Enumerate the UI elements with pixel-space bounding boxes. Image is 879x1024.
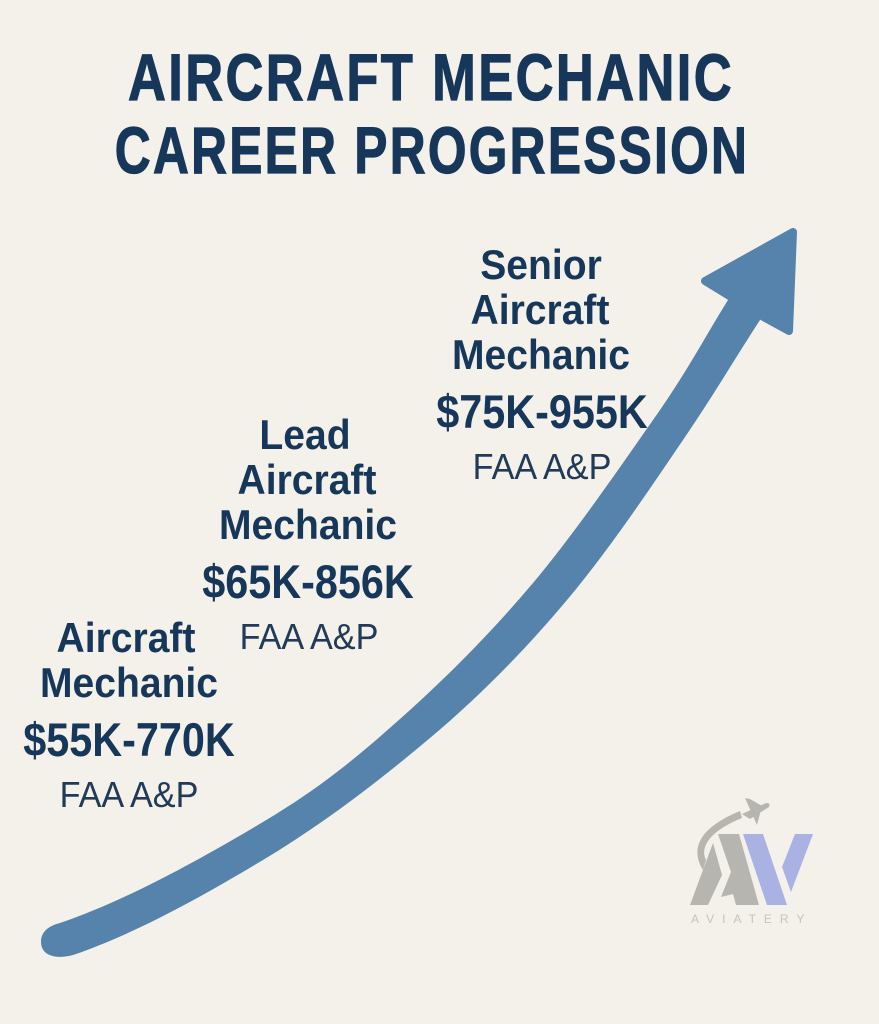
level: aircraft mechanic: FAA A&P	[60, 774, 198, 815]
title	[115, 40, 749, 187]
level: senior aircraft mechanic: Aircraft	[471, 286, 609, 333]
logo letter V	[743, 834, 813, 905]
level: senior aircraft mechanic: Senior	[480, 241, 602, 288]
level: lead aircraft mechanic: Lead	[259, 411, 351, 458]
logo letter A	[690, 834, 759, 905]
level: lead aircraft mechanic: Mechanic	[219, 501, 397, 548]
level: aircraft mechanic: Aircraft	[57, 614, 195, 661]
level: lead aircraft mechanic: Aircraft	[238, 456, 376, 503]
logo: aviatery	[690, 798, 813, 926]
level: senior aircraft mechanic: Mechanic	[452, 331, 630, 378]
level: senior aircraft mechanic: $75K-955K	[436, 385, 648, 438]
level: aircraft mechanic: Mechanic	[40, 659, 218, 706]
title: AIRCRAFT MECHANIC	[127, 40, 734, 114]
level: lead aircraft mechanic: $65K-856K	[202, 555, 414, 608]
title: CAREER PROGRESSION	[115, 113, 749, 187]
level: aircraft mechanic: $55K-770K	[23, 713, 235, 766]
level: senior aircraft mechanic: FAA A&P	[473, 446, 611, 487]
logo wordmark: AVIATERY	[691, 912, 812, 926]
level: senior aircraft mechanic	[436, 241, 648, 487]
level: aircraft mechanic	[23, 614, 235, 815]
level: lead aircraft mechanic	[202, 411, 414, 657]
logo swoosh and plane	[697, 798, 770, 870]
level: lead aircraft mechanic: FAA A&P	[240, 616, 378, 657]
